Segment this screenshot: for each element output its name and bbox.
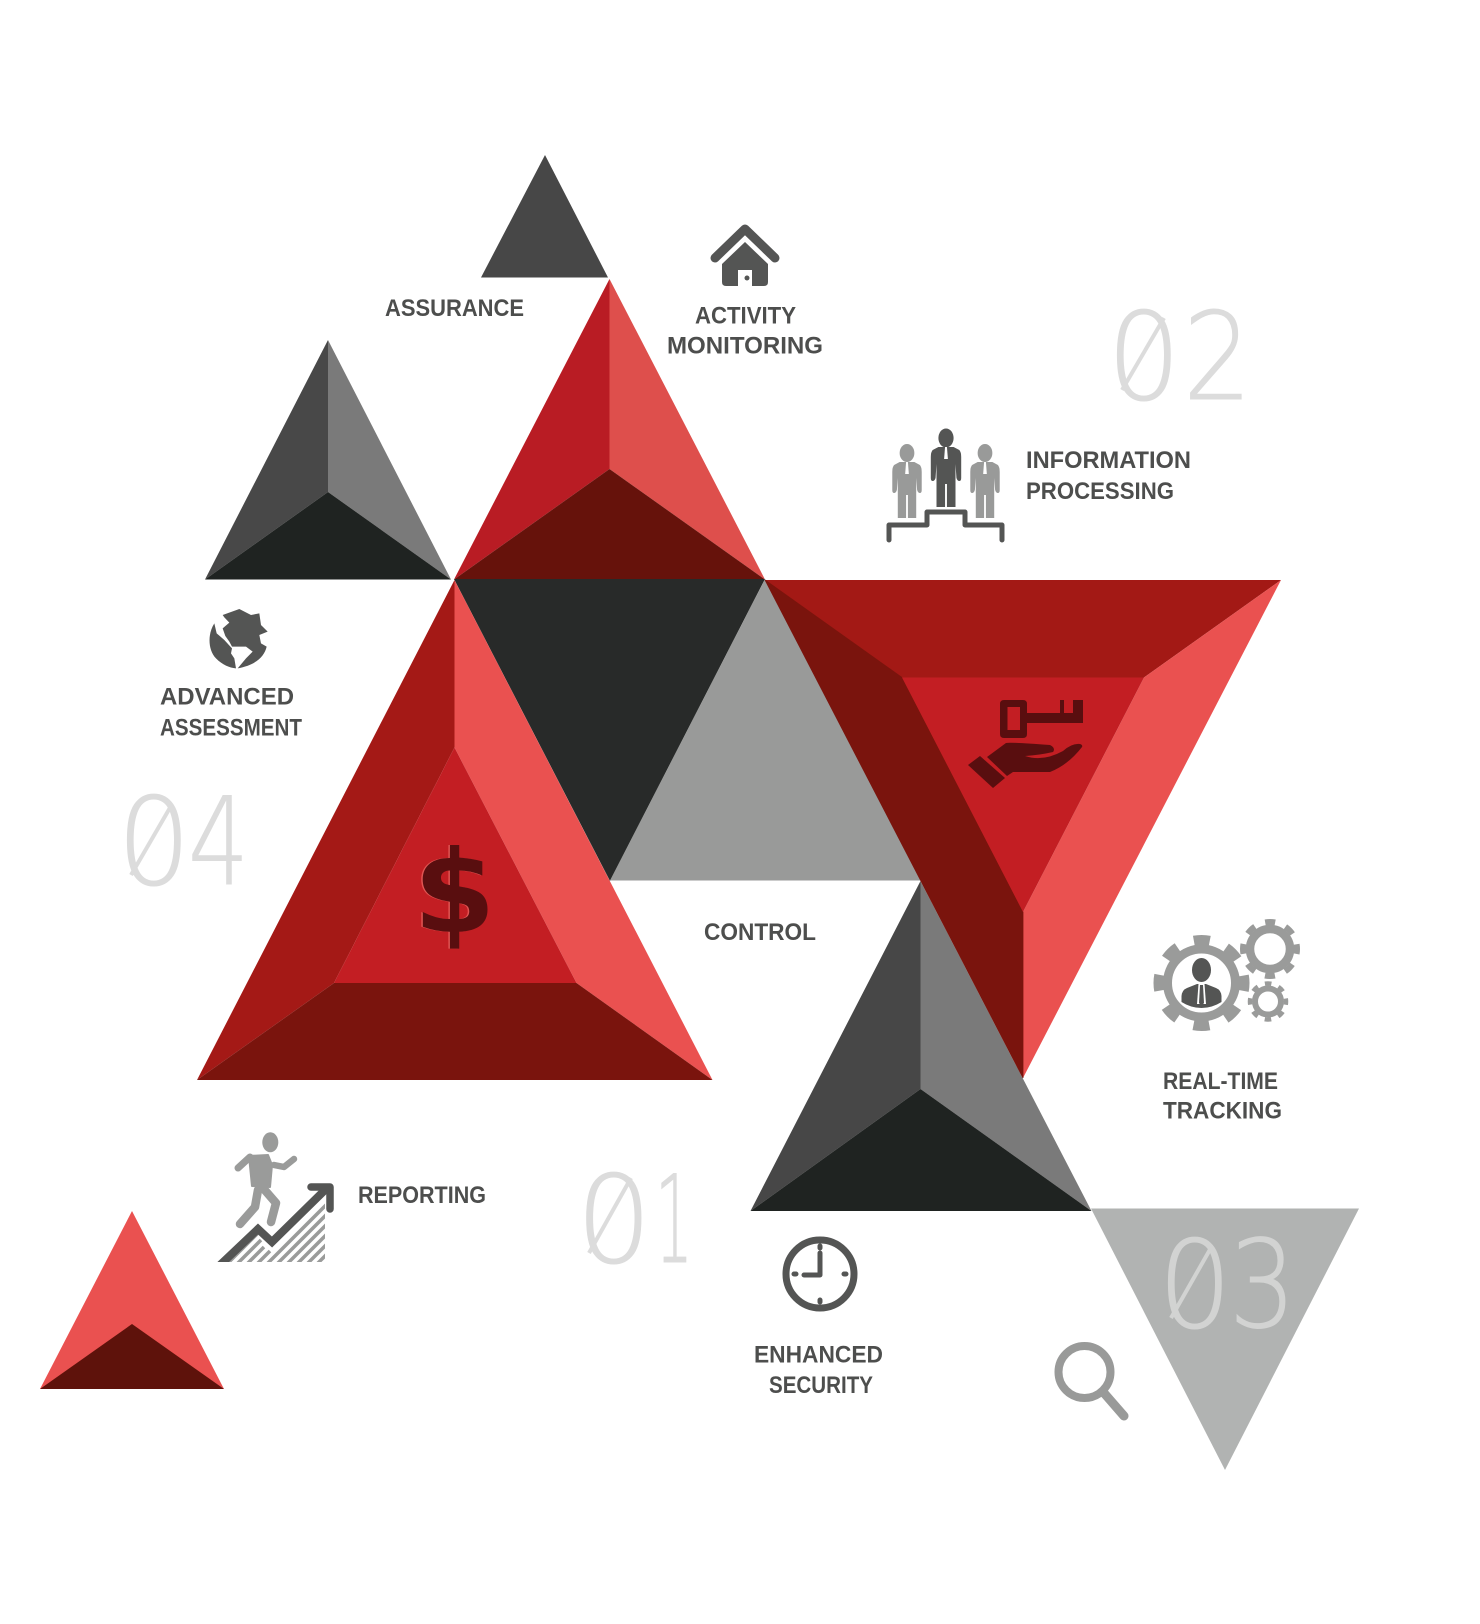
label: enhanced security [754,1342,883,1399]
triangle: small red bottom left [40,1211,224,1389]
number: 02: 2 [1183,287,1252,428]
icon: gears with person [1158,922,1297,1026]
label: advanced assessment [160,684,302,742]
label: activity monitoring: MONITORING [667,332,823,360]
label: information processing [1026,447,1191,505]
triangle: lower dark pyramid [750,881,1092,1211]
gear: top right [1243,922,1297,976]
person: centre [931,428,961,507]
label: advanced assessment: ASSESSMENT [160,714,302,742]
label: real-time tracking: REAL-TIME [1163,1068,1278,1095]
text: 1 [655,1150,693,1291]
number: 02: 0 [1107,287,1181,428]
person: left [892,444,922,518]
number: 04: 0 [117,772,191,913]
number: 01: 0 [576,1150,652,1291]
gear: bottom right [1250,984,1286,1020]
triangle: red inverted pyramid with key [765,580,1281,1078]
triangle: small dark top [481,155,608,278]
person: right [970,444,1000,518]
label: activity monitoring: ACTIVITY [695,302,796,330]
icon: clock [786,1240,854,1308]
triangle: large red pyramid with dollar [197,580,712,1080]
gear: large [1158,940,1244,1026]
icon: runner on rising arrow [219,1132,330,1266]
triangle: light grey inverted with 03 [1091,1208,1359,1470]
label: information processing: PROCESSING [1026,478,1174,505]
number: 03 [1158,1215,1296,1356]
triangle: grey centre [610,579,921,880]
triangle: red pyramid top [454,279,765,580]
triangle: dark centre inverted [454,579,765,881]
icon: three people on podium [889,428,1002,540]
number: 02 [1107,287,1252,428]
label: real-time tracking: TRACKING [1163,1098,1282,1124]
icon: key in hand [968,700,1083,788]
number: 04 [117,772,249,913]
triangle: dark pyramid top left [205,340,451,580]
icon: dollar sign: $ [412,826,494,959]
label: enhanced security: ENHANCED [754,1342,883,1368]
icon: house [715,229,775,286]
label: activity monitoring [667,302,823,360]
number: 01 [576,1150,693,1291]
person in gear [1182,958,1222,1008]
label: information processing: INFORMATION [1026,447,1191,474]
number: 03: 3 [1229,1215,1296,1356]
label: real-time tracking [1163,1068,1282,1124]
runner [238,1132,294,1224]
number: 03: 0 [1158,1215,1232,1356]
label: assurance: ASSURANCE [385,295,524,322]
label: enhanced security: SECURITY [769,1372,873,1399]
label: control: CONTROL [704,919,816,946]
hatched chart area [229,1204,325,1262]
icon: magnifier [1058,1346,1124,1416]
icon: globe [210,609,268,668]
arrow [219,1187,328,1266]
label: advanced assessment: ADVANCED [160,684,294,710]
label: reporting: REPORTING [358,1182,486,1209]
icon: dollar sign: $ [414,826,496,959]
number: 04: 4 [188,772,249,913]
